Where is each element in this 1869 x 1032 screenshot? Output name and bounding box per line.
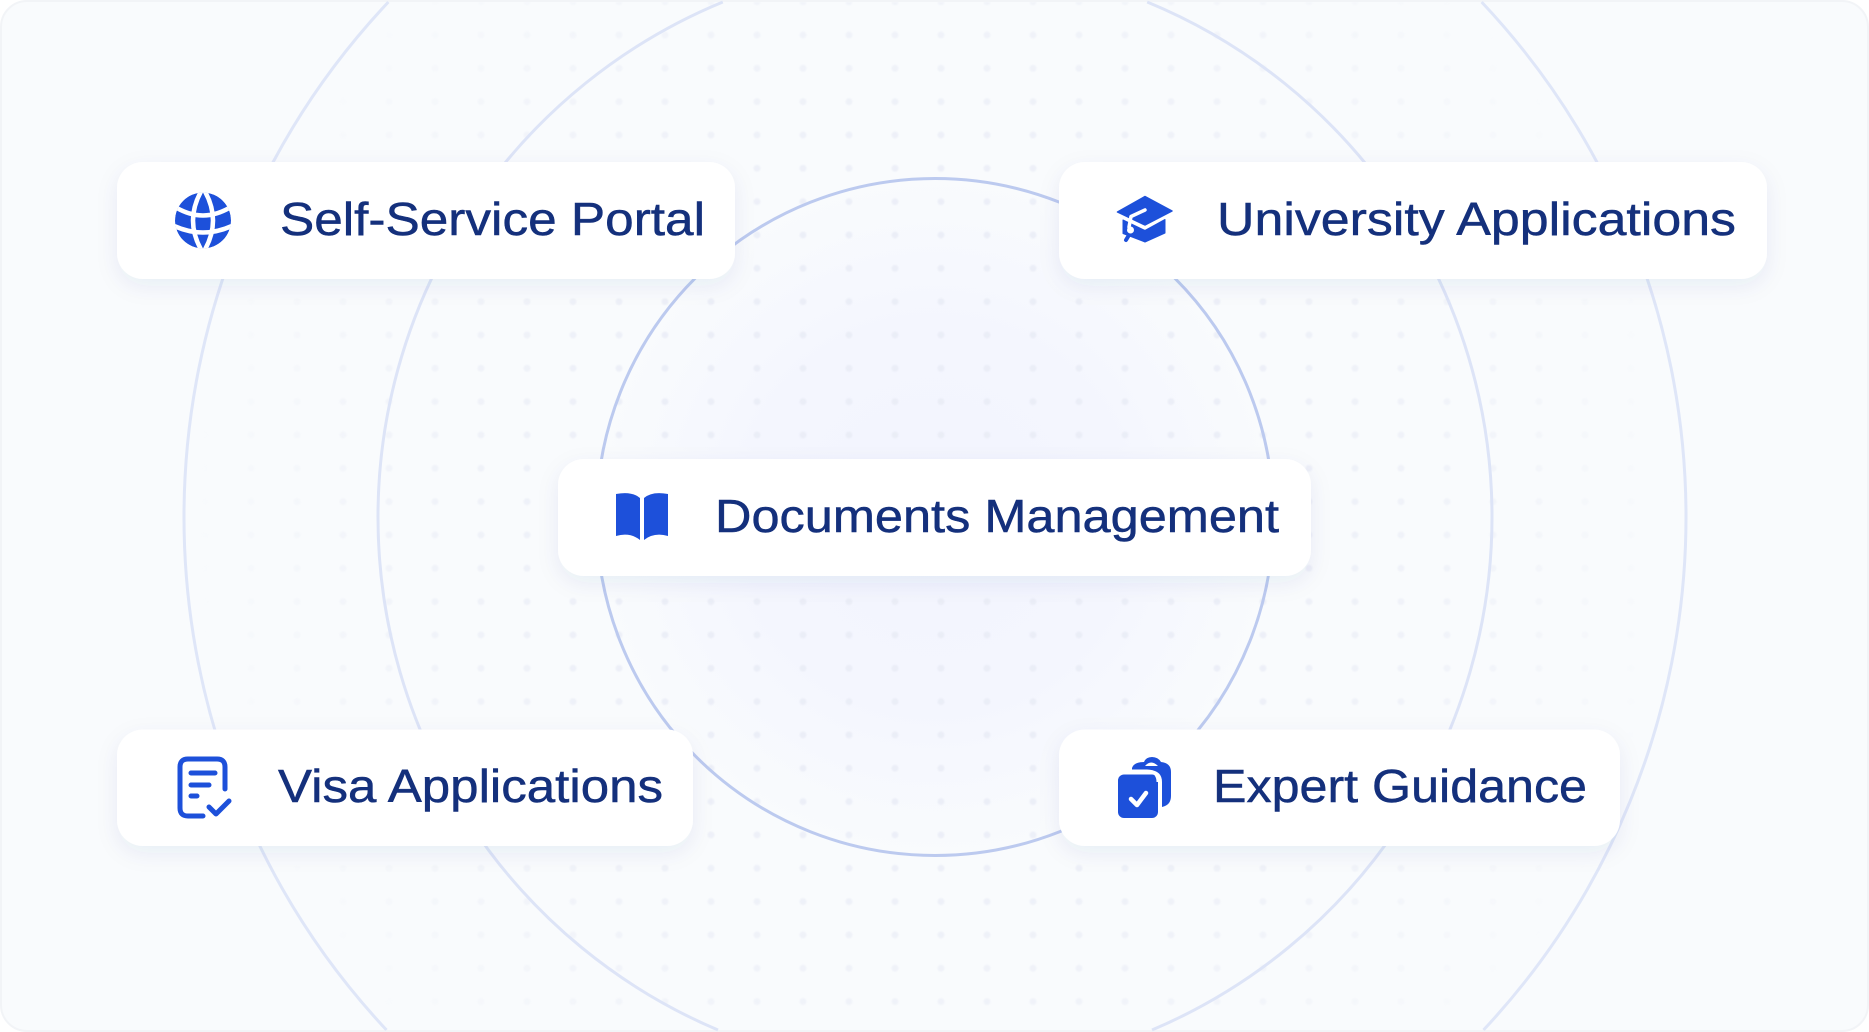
label: Expert Guidance: Expert Guidance bbox=[1213, 760, 1587, 812]
icon: document with check bbox=[180, 759, 229, 816]
label: Self-Service Portal: Self-Service Portal bbox=[280, 193, 705, 245]
card: Expert Guidance bbox=[1059, 730, 1620, 846]
icon: clipboards with check bbox=[1118, 757, 1171, 818]
card: Self-Service Portal bbox=[117, 162, 735, 279]
icon: globe bbox=[175, 192, 231, 248]
card: Documents Management bbox=[558, 459, 1311, 576]
label: University Applications: University Applications bbox=[1217, 193, 1736, 245]
label: Visa Applications: Visa Applications bbox=[278, 760, 663, 812]
icon: open book bbox=[616, 493, 668, 540]
icon: graduation cap bbox=[1118, 196, 1172, 242]
label: Documents Management: Documents Management bbox=[715, 490, 1279, 542]
card: University Applications bbox=[1059, 162, 1767, 279]
card: Visa Applications bbox=[117, 730, 693, 846]
